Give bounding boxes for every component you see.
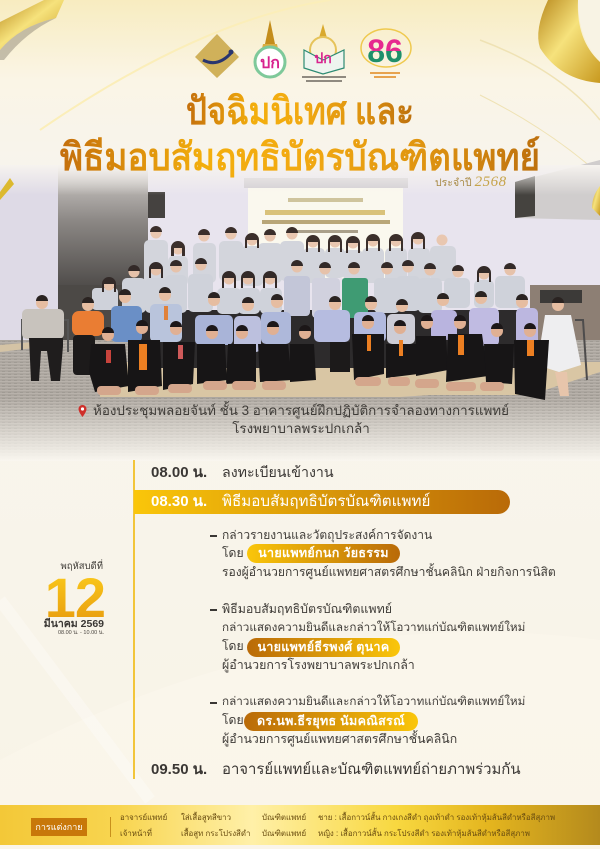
title (60, 91, 540, 179)
dress code band (0, 805, 600, 845)
role: รองผู้อำนวยการศูนย์แพทยศาสตรศึกษาชั้นคลินิก ฝ่ายกิจการนิสิต (222, 565, 556, 579)
back row (144, 226, 456, 286)
dress code text: ชาย : เสื้อกาวน์สั้น กางเกงสีดำ ถุงเท้าดำ รองเท้าหุ้มส้นสีดำหรือสีสุภาพ (318, 813, 555, 822)
weekday: พฤหัสบดีที่ (60, 561, 103, 572)
item 08.00: 08.00 น. (151, 464, 207, 481)
logo: medical education centre (195, 34, 239, 78)
name pill (247, 544, 400, 563)
highlighted bar 08.30: พิธีมอบสัมฤทธิบัตรบัณฑิตแพทย์ (222, 493, 430, 510)
dress code text: เสื้อสูท กระโปรงสีดำ (181, 829, 250, 838)
line: พิธีมอบสัมฤทธิบัตรบัณฑิตแพทย์ (222, 602, 392, 616)
subtitle year: ประจำปี 2568 (435, 174, 507, 190)
line: กล่าวแสดงความยินดีและกล่าวให้โอวาทแก่บัณฑิตแพทย์ใหม่ (222, 695, 525, 708)
name pill (244, 712, 418, 731)
block 3 (210, 694, 525, 746)
dress code text: บัณฑิตแพทย์ (262, 813, 306, 822)
presenter line: โดย (222, 713, 244, 727)
gold ribbon top right (538, 0, 600, 83)
title: ปัจฉิมนิเทศ และ (186, 91, 414, 133)
sofa (130, 310, 525, 368)
logo: 86 years (361, 29, 411, 78)
venue text: ห้องประชุมพลอยจันท์ ชั้น 3 อาคารศูนย์ฝึกปฏิบัติการจำลองทางการแพทย์ (93, 403, 509, 418)
venue text (93, 401, 509, 436)
icon: map pin (78, 405, 86, 417)
highlighted bar 08.30: 08.30 น. (151, 493, 207, 510)
dress code text: ใส่เสื้อสูทสีขาว (181, 813, 231, 822)
gold ribbon left (0, 178, 14, 200)
role: ผู้อำนวยการโรงพยาบาลพระปกเกล้า (222, 658, 415, 672)
presenter line: โดย (222, 546, 244, 560)
photo (0, 160, 600, 461)
month and year: มีนาคม 2569 (44, 618, 104, 630)
name pill: นายแพทย์กนก วัยธรรม (258, 546, 389, 560)
seated row (22, 287, 587, 396)
date number: 12 (45, 566, 105, 629)
logo: clinical centre book (302, 24, 346, 82)
line: กล่าวรายงานและวัตถุประสงค์การจัดงาน (222, 528, 432, 542)
highlighted bar 08.30 (134, 490, 510, 514)
date block (44, 559, 105, 636)
venue text: โรงพยาบาลพระปกเกล้า (232, 421, 370, 436)
gold ribbon right (592, 186, 600, 216)
item 08.00: ลงทะเบียนเข้างาน (222, 465, 334, 481)
dress code text: เจ้าหน้าที่ (120, 829, 152, 838)
dress code text: หญิง : เสื้อกาวน์สั้น กระโปรงสีดำ รองเท้าหุ้มส้นสีดำหรือสีสุภาพ (318, 829, 530, 838)
logo: clinical centre book: ปก (314, 50, 332, 66)
venue (78, 401, 509, 436)
second row (92, 258, 525, 318)
logos row (195, 20, 412, 82)
kneeling front row (89, 315, 549, 400)
logo: hospital crest (255, 20, 285, 77)
block 2 (210, 602, 525, 672)
dash (210, 702, 217, 704)
logo: 86 years: 86 (367, 33, 403, 69)
line: กล่าวแสดงความยินดีและกล่าวให้โอวาทแก่บัณฑิตแพทย์ใหม่ (222, 621, 525, 634)
item 08.00 (151, 464, 334, 481)
dress code text: บัณฑิตแพทย์ (262, 829, 306, 838)
dress code text: อาจารย์แพทย์ (120, 813, 167, 822)
dash (210, 535, 217, 537)
logo: hospital crest: ปก (260, 55, 280, 72)
title: พิธีมอบสัมฤทธิบัตรบัณฑิตแพทย์ (60, 136, 540, 179)
role: ผู้อำนวยการศูนย์แพทยศาสตรศึกษาชั้นคลินิก (222, 732, 457, 746)
name pill: นายแพทย์ธีรพงศ์ ตุนาค (258, 640, 390, 654)
schedule timeline (133, 460, 556, 779)
name pill: ดร.นพ.ธีรยุทธ นัมคณิสรณ์ (257, 714, 405, 728)
divider (110, 817, 111, 837)
dash (210, 609, 217, 611)
name pill (247, 638, 400, 657)
dress code label: การแต่งกาย (35, 822, 83, 832)
timeline rule (133, 460, 134, 779)
time range: 08.00 น. - 10.00 น. (58, 630, 104, 636)
dress code label (31, 818, 87, 836)
item 09.50: อาจารย์แพทย์และบัณฑิตแพทย์ถ่ายภาพร่วมกัน (222, 762, 521, 778)
item 09.50: 09.50 น. (151, 761, 207, 778)
gold ribbon top left (0, 0, 64, 60)
presenter line: โดย (222, 639, 244, 653)
block 1 (210, 528, 556, 580)
